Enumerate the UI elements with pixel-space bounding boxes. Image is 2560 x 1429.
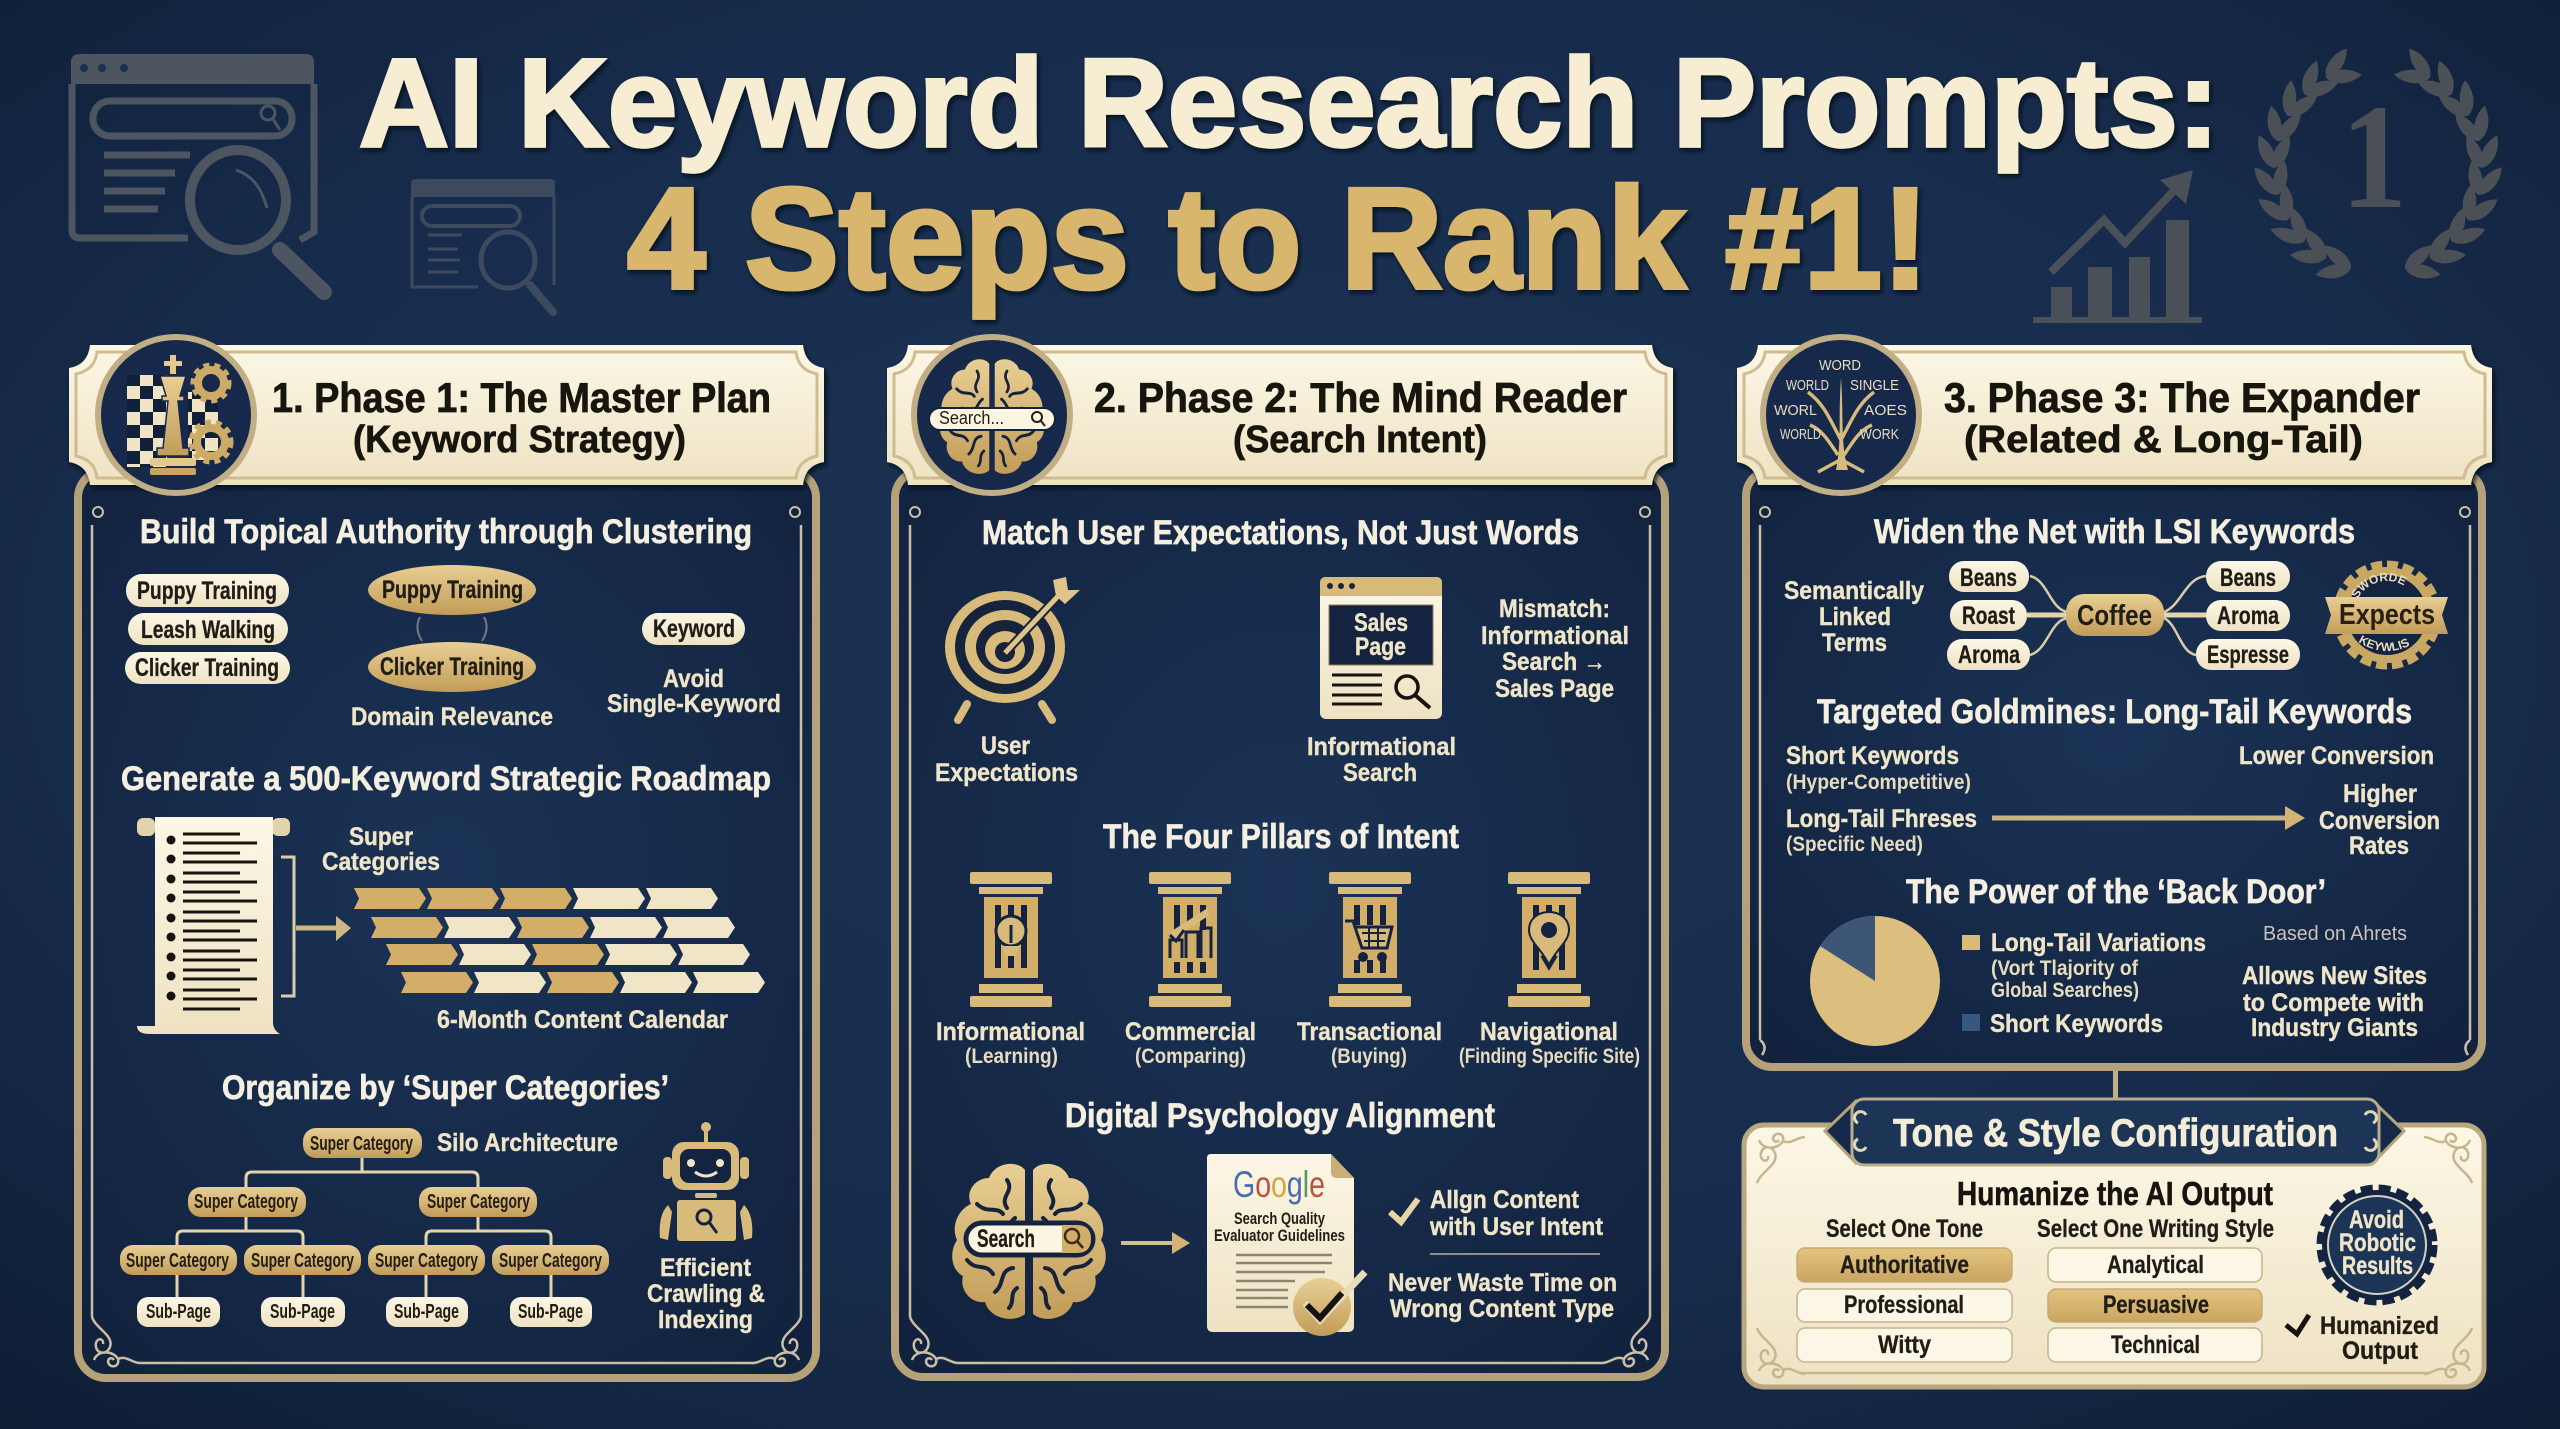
domain relevance cluster: Domain Relevance — [351, 703, 553, 731]
callout: mismatch: Informational — [1481, 622, 1629, 650]
label: humanized output: Output — [2342, 1337, 2419, 1365]
heading: super categories: Organize by ‘Super Categories’ — [222, 1069, 669, 1107]
icon: sales page window — [1320, 577, 1442, 719]
heading: long-tail: Targeted Goldmines: Long-Tail Keywords — [1817, 693, 2412, 731]
icon: target with arrow — [945, 577, 1080, 720]
icon: word tree medallion: SINGLE — [1850, 377, 1899, 394]
heading: humanize: Humanize the AI Output — [1957, 1175, 2273, 1212]
heading: lsi keywords: Widen the Net with LSI Keywords — [1874, 513, 2355, 551]
callout: mismatch — [1481, 595, 1629, 703]
icon: word tree medallion: WORK — [1860, 426, 1899, 443]
heading text: (Related & Long-Tail) — [1964, 419, 2363, 461]
heading text: (Keyword Strategy) — [353, 419, 686, 461]
pillar: commercial — [1149, 872, 1231, 1007]
banner: phase 3 — [1737, 345, 2492, 485]
label: humanized output — [2286, 1312, 2439, 1365]
icon: expects badge — [2325, 560, 2448, 670]
column: writing style options: Analytical — [2107, 1251, 2204, 1279]
heading text — [272, 374, 771, 461]
icon: brain medallion: Search... — [939, 408, 1004, 428]
icon: word tree medallion: AOES — [1864, 402, 1907, 419]
legend: Short Keywords — [1990, 1010, 2163, 1038]
label: semantically linked terms: Terms — [1822, 629, 1887, 657]
column: writing style options: Persuasive — [2103, 1291, 2209, 1319]
callout: align content: Allgn Content — [1430, 1186, 1580, 1214]
column: writing style options: Select One Writing Style — [2037, 1215, 2274, 1243]
icon: laurel number one watermark — [2248, 42, 2508, 290]
heading: back door: The Power of the ‘Back Door’ — [1906, 873, 2326, 911]
callout: align content: Never Waste Time on — [1388, 1269, 1617, 1297]
label: semantically linked terms: Linked — [1819, 603, 1891, 631]
label: efficient crawling: Indexing — [658, 1306, 753, 1334]
label: semantically linked terms — [1784, 577, 1924, 657]
icon: word tree medallion: WORD — [1819, 357, 1861, 374]
single keyword warning: Avoid — [663, 665, 724, 693]
column: tone options: Authoritative — [1840, 1251, 1969, 1279]
heading: roadmap: Generate a 500-Keyword Strategic Roadmap — [121, 760, 771, 798]
arrow: scroll to calendar — [281, 857, 351, 996]
icon: avoid robotic results seal: Results — [2342, 1252, 2413, 1280]
keyword pills: Clicker Training — [135, 654, 279, 682]
single keyword warning: Keyword — [653, 615, 735, 643]
comparison: short vs long-tail: Rates — [2349, 832, 2409, 860]
callout: mismatch: Mismatch: — [1499, 595, 1610, 623]
icon: small browser search watermark — [411, 179, 555, 312]
heading text — [1094, 374, 1627, 461]
heading text: 2. Phase 2: The Mind Reader — [1094, 374, 1627, 421]
heading: four pillars: The Four Pillars of Intent — [1103, 818, 1459, 856]
document: google guidelines: Search Quality — [1234, 1209, 1325, 1228]
label: efficient crawling — [647, 1254, 765, 1334]
diagram: coffee mind map: Aroma — [2217, 602, 2280, 630]
chart: silo tree: Super Category — [375, 1250, 479, 1272]
diagram: coffee mind map: Aroma — [1958, 641, 2021, 669]
title ribbon: Tone & Style Configuration — [1893, 1112, 2338, 1155]
legend — [1962, 929, 2206, 1038]
pillar labels: Navigational — [1480, 1018, 1618, 1046]
column: tone options — [1797, 1215, 2012, 1362]
chart: silo tree: Sub-Page — [518, 1301, 583, 1323]
pillar labels: Commercial — [1125, 1018, 1256, 1046]
document: google guidelines: Evaluator Guidelines — [1214, 1226, 1345, 1245]
label: calendar: 6-Month Content Calendar — [437, 1006, 728, 1034]
heading text: (Search Intent) — [1233, 419, 1487, 461]
banner: phase 1 — [69, 345, 824, 485]
chart: silo tree: Super Category — [427, 1191, 531, 1213]
chart: silo tree: Super Category — [310, 1133, 414, 1155]
icon: keyword scroll — [137, 817, 290, 1034]
pillar labels: (Buying) — [1331, 1045, 1407, 1068]
pillar labels: Transactional — [1297, 1018, 1442, 1046]
callout: new sites: to Compete with — [2243, 989, 2424, 1017]
diagram: coffee mind map: Roast — [1962, 602, 2016, 630]
heading: clustering: Build Topical Authority through Clustering — [140, 513, 752, 551]
icon: expects badge: KEYWLIS — [2358, 635, 2409, 652]
icon: expects badge: LSWORDE — [2352, 572, 2407, 597]
title: 4 Steps to Rank #1! — [627, 158, 1929, 319]
label: efficient crawling: Crawling & — [647, 1280, 765, 1308]
pillar labels: (Learning) — [965, 1045, 1058, 1068]
icon: word tree medallion: WORL — [1774, 402, 1817, 419]
diagram: coffee mind map: Beans — [1960, 564, 2017, 592]
icon: large browser search watermark — [71, 54, 324, 292]
comparison: short vs long-tail: Short Keywords — [1786, 742, 1959, 770]
chart: silo tree: Sub-Page — [394, 1301, 459, 1323]
chart: silo tree — [120, 1128, 618, 1327]
icon: brain with search bar — [952, 1164, 1106, 1319]
pillar: transactional — [1329, 872, 1411, 1007]
arrow: brain to guidelines — [1121, 1232, 1190, 1254]
icon: word tree medallion: WORLD — [1780, 426, 1821, 443]
comparison: short vs long-tail: Lower Conversion — [2239, 742, 2434, 770]
label: humanized output: Humanized — [2320, 1312, 2439, 1340]
panel: phase 2 — [895, 470, 1665, 1377]
column: tone options: Select One Tone — [1826, 1215, 1983, 1243]
column: writing style options: Technical — [2111, 1331, 2200, 1359]
domain relevance cluster: Clicker Training — [380, 653, 524, 681]
label: user expectations — [935, 732, 1078, 787]
label: informational search: Search — [1343, 759, 1417, 787]
label: efficient crawling: Efficient — [660, 1254, 752, 1282]
diagram: coffee mind map: Coffee — [2077, 600, 2152, 632]
domain relevance cluster: Puppy Training — [382, 576, 523, 604]
pillar: informational — [970, 872, 1052, 1007]
chart: silo tree: Super Category — [194, 1191, 299, 1213]
heading text: 3. Phase 3: The Expander — [1944, 374, 2420, 421]
diagram: coffee mind map: Beans — [2220, 564, 2276, 592]
domain relevance cluster — [351, 565, 553, 731]
comparison: short vs long-tail: Long-Tail Fhreses — [1786, 805, 1977, 833]
chart: search share pie — [1810, 916, 1940, 1046]
title — [359, 34, 2219, 319]
heading: psychology: Digital Psychology Alignment — [1065, 1097, 1495, 1135]
icon: sales page window: Page — [1355, 633, 1406, 661]
callout: align content: with User Intent — [1429, 1213, 1604, 1241]
callout: mismatch: Sales Page — [1495, 675, 1614, 703]
icon: brain with search bar: Search — [977, 1225, 1035, 1253]
icon: brain medallion — [914, 337, 1070, 493]
comparison: short vs long-tail: Higher — [2343, 780, 2417, 808]
chart: silo tree: Sub-Page — [270, 1301, 335, 1323]
comparison: short vs long-tail: (Specific Need) — [1786, 833, 1923, 856]
heading text — [1944, 374, 2420, 461]
panel: phase 3 — [1742, 472, 2486, 1071]
connector: phase 3 to tone panel — [2113, 1071, 2118, 1099]
keyword pills: Puppy Training — [137, 577, 277, 605]
icon: avoid robotic results seal: Robotic — [2339, 1229, 2416, 1257]
label: informational search: Informational — [1307, 733, 1456, 761]
pillar labels — [936, 1018, 1640, 1068]
icon: avoid robotic results seal — [2320, 1188, 2434, 1302]
pillar labels: (Finding Specific Site) — [1459, 1045, 1640, 1068]
chart: silo tree: Super Category — [251, 1250, 355, 1272]
callout: new sites: Allows New Sites — [2242, 962, 2427, 990]
label: user expectations: User — [981, 732, 1030, 760]
icon: chess medallion — [98, 337, 254, 493]
label: user expectations: Expectations — [935, 759, 1078, 787]
legend: (Vort Tlajority of — [1991, 957, 2139, 980]
column: tone options: Witty — [1878, 1331, 1931, 1359]
icon: rising chart watermark — [2033, 170, 2202, 323]
column: tone options: Professional — [1844, 1291, 1964, 1319]
comparison: short vs long-tail: (Hyper-Competitive) — [1786, 771, 1971, 794]
icon: sales page window: Sales — [1354, 609, 1408, 637]
diagram: coffee mind map — [1947, 561, 2300, 670]
icon: expects badge: Expects — [2339, 599, 2435, 631]
label: super categories: Categories — [322, 848, 440, 876]
banner: phase 2 — [887, 345, 1673, 485]
heading text: 1. Phase 1: The Master Plan — [272, 374, 771, 421]
document: google guidelines — [1207, 1154, 1365, 1336]
heading: user expectations: Match User Expectations, Not Just Words — [982, 514, 1579, 552]
title: AI Keyword Research Prompts: — [359, 34, 2219, 173]
chart: silo tree: Super Category — [499, 1250, 603, 1272]
callout: mismatch: Search → — [1502, 648, 1606, 676]
icon: word tree medallion: WORLD — [1786, 377, 1829, 394]
label: semantically linked terms: Semantically — [1784, 577, 1924, 605]
chart: silo tree: Super Category — [126, 1250, 230, 1272]
title ribbon — [1825, 1099, 2404, 1165]
single keyword warning — [607, 613, 781, 718]
label: super categories — [322, 823, 440, 876]
legend: Global Searches) — [1991, 979, 2139, 1002]
panel: phase 1 — [78, 470, 816, 1378]
document: google guidelines: Google — [1233, 1164, 1325, 1205]
callout: align content — [1388, 1186, 1617, 1323]
callout: new sites: Industry Giants — [2251, 1014, 2418, 1042]
comparison: short vs long-tail — [1786, 742, 2440, 860]
pillar labels: Informational — [936, 1018, 1085, 1046]
column: writing style options — [2037, 1215, 2274, 1362]
keyword pills: Leash Walking — [141, 616, 275, 644]
callout: new sites — [2242, 962, 2427, 1042]
keyword pills — [125, 574, 290, 684]
pillar: navigational — [1508, 872, 1590, 1007]
icon: laurel number one watermark: 1 — [2341, 74, 2407, 240]
legend: Long-Tail Variations — [1991, 929, 2206, 957]
label: informational search — [1307, 733, 1456, 787]
comparison: short vs long-tail: Conversion — [2319, 807, 2440, 835]
callout: align content: Wrong Content Type — [1390, 1295, 1614, 1323]
chart: silo tree: Sub-Page — [146, 1301, 211, 1323]
label: super categories: Super — [349, 823, 413, 851]
chevrons: content calendar — [354, 888, 765, 993]
diagram: coffee mind map: Espresse — [2207, 641, 2289, 669]
pillar labels: (Comparing) — [1135, 1045, 1246, 1068]
icon: word tree medallion — [1763, 337, 1919, 493]
icon: crawling robot — [660, 1122, 752, 1241]
panel: tone and style configuration — [1744, 1099, 2484, 1387]
note: based on ahrefs: Based on Ahrets — [2263, 923, 2407, 945]
icon: avoid robotic results seal: Avoid — [2349, 1206, 2404, 1234]
single keyword warning: Single-Keyword — [607, 690, 781, 718]
chart: silo tree: Silo Architecture — [437, 1129, 618, 1157]
